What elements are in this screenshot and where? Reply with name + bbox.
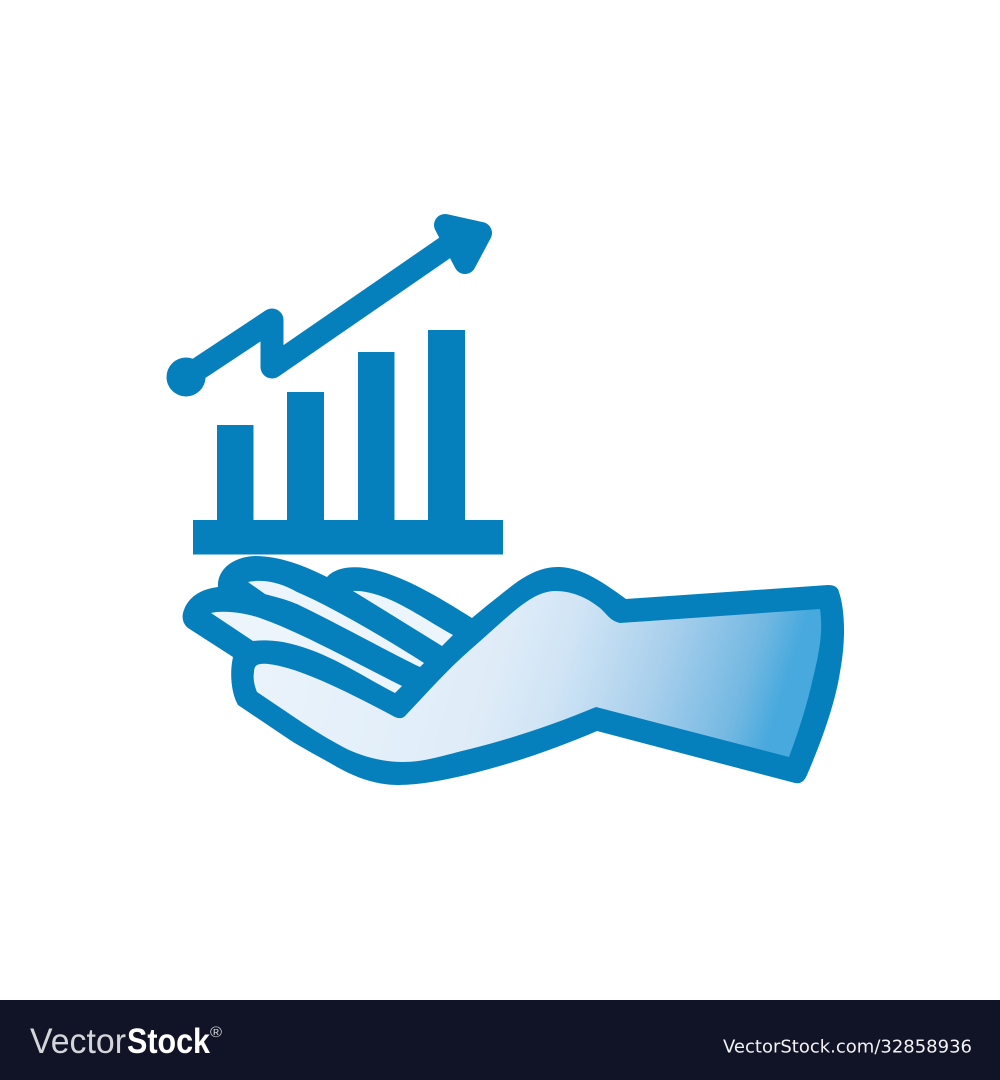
bar chart (193, 330, 503, 554)
icon: rising arrow line (166, 225, 481, 396)
icon: open hand (183, 556, 844, 785)
image reference text: VectorStock.com/32858936 (723, 1037, 972, 1058)
logo text: Vector (30, 1022, 126, 1061)
palm (254, 591, 821, 762)
finger gap: middle (248, 581, 424, 667)
footer bar (0, 1000, 1000, 1080)
finger gap: ring (211, 612, 402, 693)
finger gap: index (353, 591, 453, 646)
hand outline (183, 556, 844, 785)
logo text: ® (210, 1024, 222, 1041)
logo text (30, 1022, 222, 1061)
logo text: Stock (127, 1022, 210, 1061)
